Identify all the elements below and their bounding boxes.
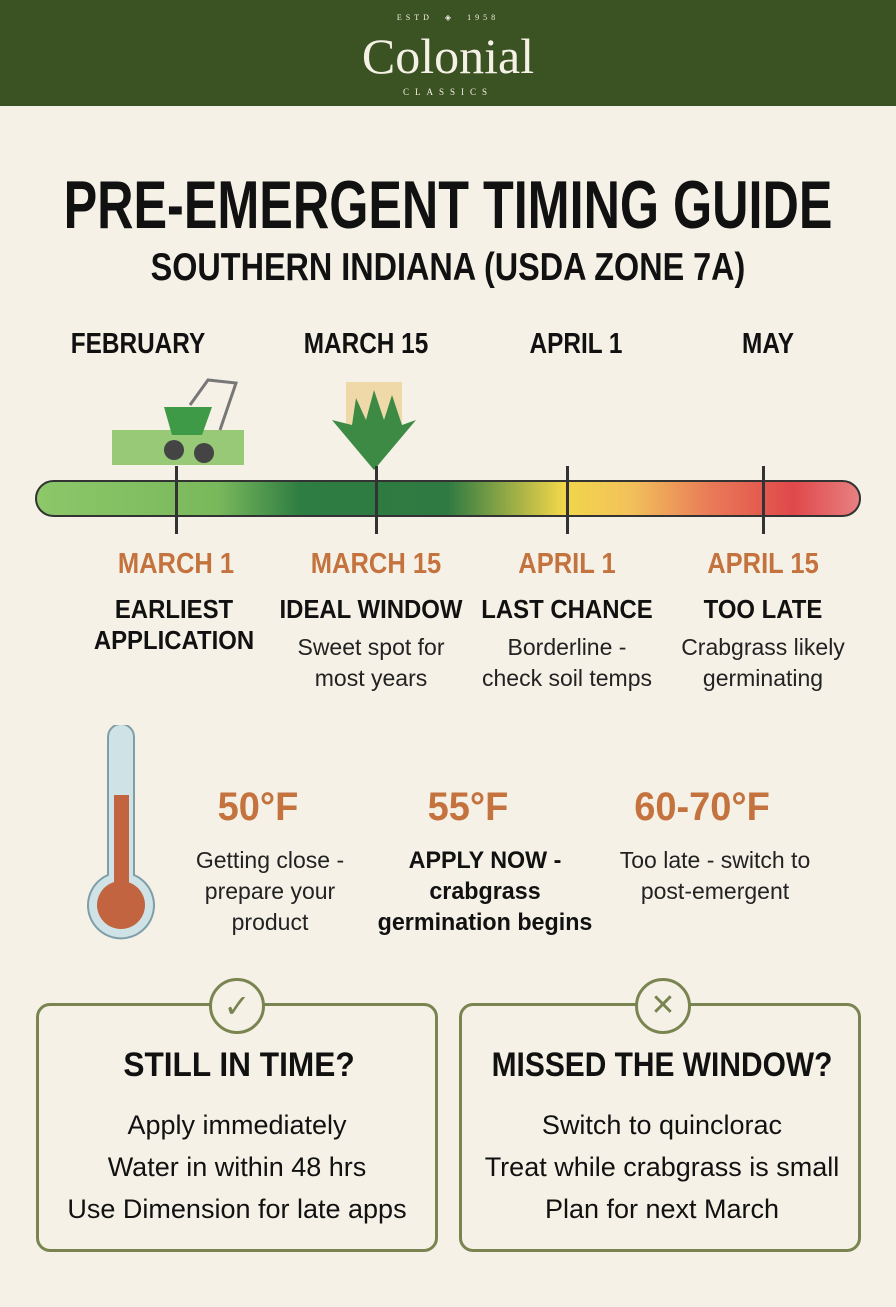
month labels <box>71 328 794 360</box>
list <box>67 1110 407 1224</box>
list: Switch to quinclorac <box>542 1110 782 1140</box>
milestone: April 15: germinating <box>703 665 823 691</box>
milestone: March 15: IDEAL WINDOW <box>280 594 462 624</box>
temp: 60-70F: Too late - switch to <box>620 847 810 873</box>
month labels: APRIL 1 <box>530 328 622 360</box>
temp: 50F: product <box>232 909 308 935</box>
milestone: April 1: check soil temps <box>482 665 652 691</box>
milestone: April 15: APRIL 15 <box>707 548 819 580</box>
milestone: April 1: APRIL 1 <box>518 548 616 580</box>
logo name: Colonial <box>362 28 534 84</box>
timeline bar <box>35 480 861 517</box>
icon: spreader <box>112 378 244 465</box>
milestone: April 15 <box>681 548 845 691</box>
list: Use Dimension for late apps <box>67 1194 407 1224</box>
panel: still in time <box>36 1003 438 1252</box>
temp: 55F: crabgrass <box>429 878 541 905</box>
heading: MISSED THE WINDOW? <box>492 1046 832 1084</box>
milestone: March 1: EARLIEST <box>115 594 233 624</box>
temp: 60-70F: post-emergent <box>641 878 789 904</box>
logo estd: ESTD ◈ 1958 <box>397 13 499 22</box>
milestone: March 15: MARCH 15 <box>311 548 441 580</box>
list: Treat while crabgrass is small <box>485 1152 839 1182</box>
tick marks <box>175 466 765 534</box>
temp: 50F: 50°F <box>218 785 298 829</box>
heading: STILL IN TIME? <box>123 1046 355 1084</box>
month labels: MAY <box>742 328 794 360</box>
milestone: March 1: APPLICATION <box>94 625 254 655</box>
icon: check: ✓ <box>224 988 250 1024</box>
icon: check <box>209 978 265 1034</box>
list <box>485 1110 839 1224</box>
temp: 50F <box>196 785 344 935</box>
list: Plan for next March <box>545 1194 779 1224</box>
icon: thermometer <box>87 725 155 940</box>
milestone: April 1: LAST CHANCE <box>481 594 653 624</box>
milestone: March 15: most years <box>315 665 427 691</box>
milestone: March 15: Sweet spot for <box>297 634 445 660</box>
temp: 55F <box>378 785 592 936</box>
icon: x <box>635 978 691 1034</box>
month labels: FEBRUARY <box>71 328 205 360</box>
milestone: April 1: Borderline - <box>508 634 626 660</box>
milestone: March 1: MARCH 1 <box>118 548 234 580</box>
logo classics: CLASSICS <box>403 87 493 97</box>
milestone: April 15: TOO LATE <box>704 594 822 624</box>
temp: 60-70F: 60-70°F <box>634 785 770 829</box>
milestone: April 1 <box>481 548 653 691</box>
temp: 55F: 55°F <box>428 785 508 829</box>
temp: 60-70F <box>620 785 810 904</box>
milestone: March 1 <box>94 548 254 655</box>
milestone: April 15: Crabgrass likely <box>681 634 845 660</box>
temp: 50F: Getting close - <box>196 847 344 873</box>
icon: x: ✕ <box>650 989 676 1022</box>
title: PRE-EMERGENT TIMING GUIDE <box>64 167 832 243</box>
temp: 50F: prepare your <box>205 878 335 904</box>
subtitle: SOUTHERN INDIANA (USDA ZONE 7A) <box>151 246 745 289</box>
icon: grass sprout <box>332 382 416 470</box>
header bar <box>0 0 896 106</box>
panel: missed the window <box>459 1003 861 1252</box>
temp: 55F: germination begins <box>378 909 592 936</box>
list: Apply immediately <box>127 1110 347 1140</box>
milestone: March 15 <box>280 548 462 691</box>
temp: 55F: APPLY NOW - <box>409 847 561 874</box>
list: Water in within 48 hrs <box>108 1152 366 1182</box>
month labels: MARCH 15 <box>304 328 428 360</box>
